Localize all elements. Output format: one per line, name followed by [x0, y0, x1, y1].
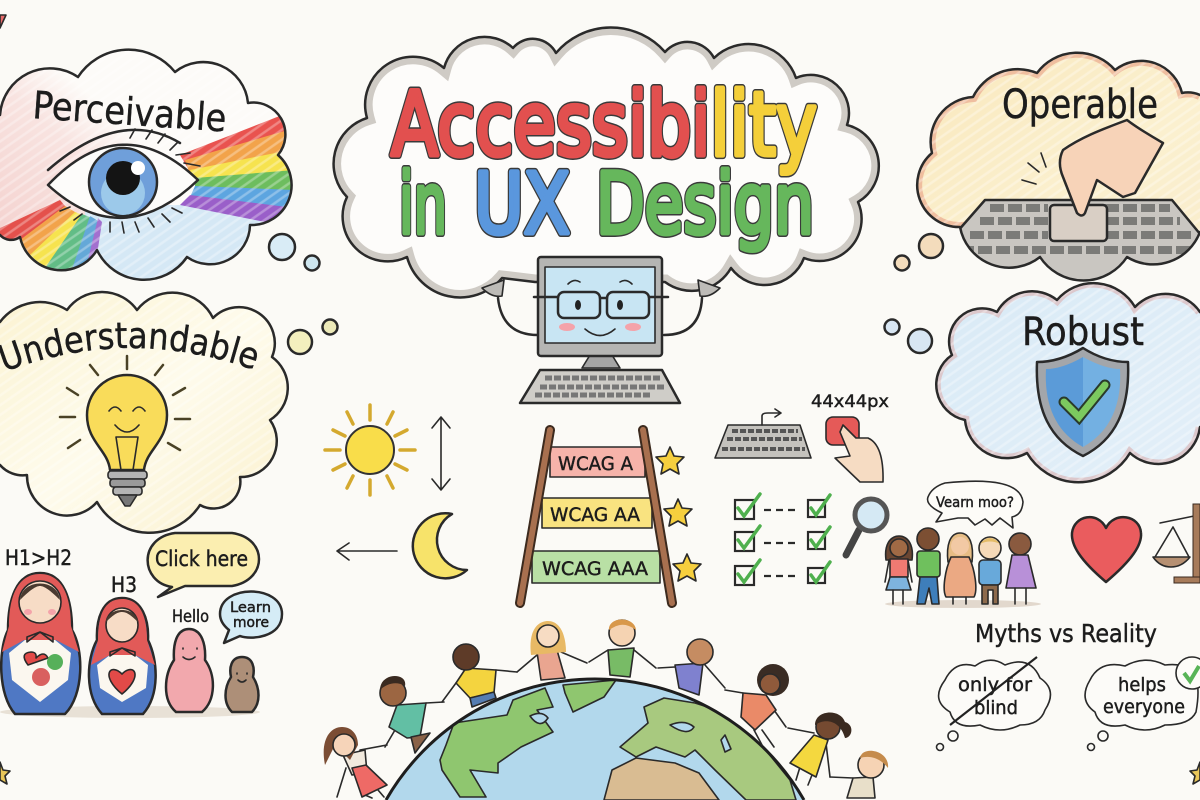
heading: Myths vs Reality: Myths vs Reality	[975, 619, 1157, 648]
figure: boy right	[830, 751, 888, 798]
figure: green shirt	[589, 620, 656, 677]
icon: small keyboard	[715, 409, 811, 458]
heading: title line 2: in	[399, 155, 447, 253]
callout: reality cloud: everyone	[1103, 696, 1185, 718]
callout: Learn more: more	[233, 615, 269, 631]
callout: Click here: Click here	[155, 547, 248, 571]
heading: title line 2: UX	[474, 155, 570, 253]
icon: medium doll	[89, 598, 156, 714]
icon: target button and hand	[826, 417, 883, 482]
panel: globe	[386, 679, 804, 800]
callout: Learn more	[220, 592, 282, 643]
heading: title line 2	[399, 155, 814, 253]
panel: WCAG ladder	[520, 430, 701, 603]
icon: rainbow	[0, 110, 295, 275]
figure: woman purple	[1006, 533, 1036, 604]
label: 44x44px: 44x44px	[811, 392, 889, 412]
rung: WCAG AA	[542, 498, 652, 528]
figure: yellow shirt	[442, 644, 517, 707]
label: Hello: Hello	[172, 607, 209, 627]
figure: boy blue	[979, 537, 1001, 604]
heading: title line 1: Accessibility	[391, 73, 817, 176]
figure: teal shirt	[380, 676, 444, 753]
icon: heart	[1072, 517, 1141, 582]
rung: WCAG A	[550, 447, 645, 477]
heading: title line 2: UX	[474, 155, 570, 253]
panel: computer mascot	[482, 257, 720, 403]
icon: moon	[413, 513, 467, 578]
icon: thought bubbles	[288, 320, 338, 354]
icon: thought bubbles	[884, 320, 932, 353]
rung: WCAG AA: WCAG AA	[550, 504, 640, 526]
figure: girl	[885, 536, 912, 604]
panel: group of people	[885, 481, 1041, 608]
panel: Operable cloud	[894, 53, 1200, 290]
panel: Perceivable cloud	[0, 40, 320, 285]
ladder rails	[520, 430, 672, 603]
heading: title line 1: Accessibility	[391, 73, 817, 176]
icon: thought bubbles	[269, 234, 320, 270]
icon: lightbulb	[60, 356, 190, 506]
label: H1>H2: H1>H2	[5, 546, 72, 570]
icon: large doll	[1, 573, 80, 714]
callout: reality cloud: helps	[1118, 674, 1166, 696]
icon: small doll	[166, 629, 213, 712]
panel: nesting dolls	[0, 533, 282, 718]
figure: purple shirt	[658, 639, 725, 695]
heading: Understandable: Understandable	[0, 322, 258, 370]
icon: shield	[1037, 348, 1128, 456]
callout: speech bubble: Vearn moo?	[936, 495, 1014, 511]
heading: title line 2: Design	[596, 155, 814, 253]
heading: Operable: Operable	[1002, 82, 1158, 128]
panel: Robust cloud	[884, 283, 1200, 482]
icon: monitor	[534, 257, 668, 368]
heading: title line 2: Design	[596, 155, 814, 253]
figure: pink top, blonde	[517, 621, 587, 680]
figure: girl red skirt	[324, 727, 387, 798]
heading: title line 2: in	[399, 155, 447, 253]
icon: sun	[325, 405, 415, 495]
callout: Click here	[148, 533, 259, 597]
panel: title cloud	[334, 28, 879, 297]
arrow: vertical double	[432, 417, 450, 490]
figure: yellow dress	[788, 713, 851, 785]
figure: man green	[917, 528, 940, 604]
icon: stars	[656, 447, 701, 581]
figure: orange shirt, curly hair	[725, 664, 789, 747]
heading: Perceivable: Perceivable	[31, 83, 228, 141]
callout: myth cloud	[936, 657, 1050, 750]
icon: hand	[1060, 120, 1163, 216]
callout: reality cloud	[1085, 657, 1200, 750]
panel: myths vs reality	[936, 619, 1200, 750]
icon: eye	[48, 129, 200, 233]
panel: Understandable cloud	[0, 290, 339, 534]
panel: people holding hands around globe	[324, 620, 888, 798]
icon: magnifier	[846, 499, 887, 555]
figure: woman blonde	[944, 533, 976, 604]
continents	[440, 680, 796, 800]
callout: speech bubble	[928, 481, 1023, 528]
icon: press marks	[1022, 153, 1046, 184]
rung: WCAG A: WCAG A	[558, 453, 633, 475]
rung: WCAG AAA	[532, 551, 660, 583]
icon: scales	[1153, 504, 1200, 583]
icon: thought bubbles	[894, 234, 943, 270]
icon: keyboard	[960, 198, 1200, 280]
rung: WCAG AAA: WCAG AAA	[542, 558, 648, 580]
heading: Robust: Robust	[1022, 310, 1144, 355]
icon: smallest doll	[226, 657, 258, 712]
callout: myth cloud: blind	[974, 697, 1018, 719]
icon: pressed key	[1050, 205, 1107, 241]
icon: arms	[482, 280, 720, 335]
panel: checklist	[735, 494, 830, 585]
arrow: left	[337, 543, 397, 560]
label: H3: H3	[111, 573, 137, 597]
callout: Learn more: Learn	[230, 600, 271, 616]
icon: keyboard	[520, 370, 680, 403]
callout: myth cloud: only for	[958, 674, 1032, 696]
